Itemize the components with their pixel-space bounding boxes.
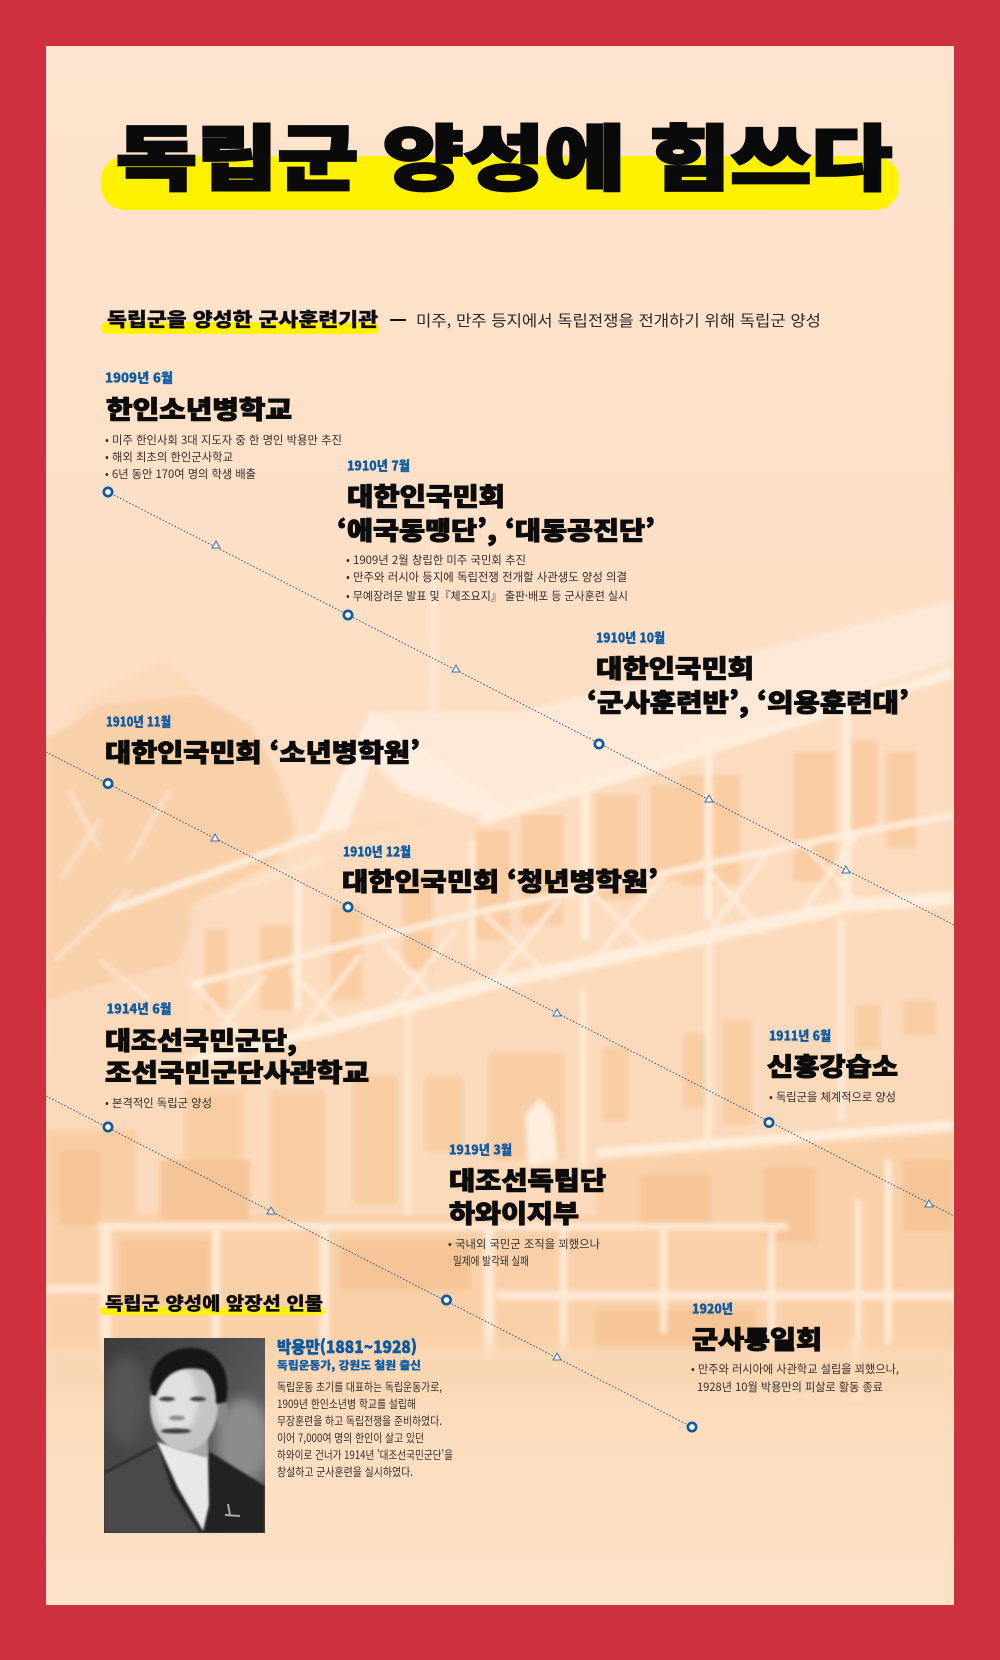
entry: 1911.6 신흥강습소 — [765, 1026, 898, 1127]
porch band — [596, 1125, 954, 1153]
tree — [46, 695, 295, 1020]
name: 대조선독립단 — [449, 1162, 606, 1198]
marker — [595, 740, 603, 748]
entry: 1920 군사통일회 — [688, 1298, 899, 1431]
name — [105, 1022, 369, 1090]
biography text: 무장훈련을 하고 독립전쟁을 준비하였다. — [277, 1413, 442, 1429]
marker — [344, 611, 352, 619]
line 3 — [46, 1096, 692, 1427]
bullets: 1928년 10월 박용만의 피살로 활동 종료 — [697, 1379, 883, 1395]
roof plane — [373, 600, 954, 812]
name — [587, 650, 909, 720]
eyes and moustache — [159, 1397, 206, 1434]
bullets: • 해외 최초의 한인군사학교 — [105, 449, 233, 465]
entry: 1910.7 대한인국민회 애국동맹단 대동공진단 — [337, 456, 655, 619]
date: 1909년 6월 — [105, 368, 173, 386]
bullets: • 국내외 국민군 조직을 꾀했으나 — [448, 1236, 600, 1252]
left lower roof — [110, 835, 318, 910]
date: 1911년 6월 — [769, 1026, 831, 1044]
lower storey — [192, 932, 773, 1070]
marker — [104, 1123, 112, 1131]
balcony railing — [190, 815, 954, 1065]
bullets: • 6년 동안 170여 명의 학생 배출 — [105, 466, 256, 482]
name — [337, 478, 655, 548]
gable — [322, 712, 509, 832]
title text: 독립군 양성에 힘쓰다 — [116, 103, 892, 205]
biography text — [277, 1379, 453, 1480]
bullets: • 만주와 러시아에 사관학교 설립을 꾀했으나, — [691, 1361, 899, 1377]
bullets: • 1909년 2월 창립한 미주 국민회 추진 — [346, 552, 526, 568]
name: 대한인국민회 ‘소년병학원’ — [105, 734, 420, 770]
heading highlight — [101, 322, 379, 334]
entry: 1919.3 대조선독립단 하와이지부 — [442, 1140, 606, 1304]
name: ‘군사훈련반’, ‘의용훈련대’ — [587, 684, 909, 720]
date: 1920년 — [692, 1298, 733, 1318]
marker — [688, 1423, 696, 1431]
section heading: training institutions — [101, 305, 821, 334]
entry: 1909 한인소년병학교 — [104, 368, 342, 496]
timeline connector lines — [46, 492, 954, 1427]
ear — [216, 1401, 228, 1424]
date: 1910년 12월 — [343, 842, 411, 860]
fence — [46, 1160, 954, 1400]
section heading: leading figure — [100, 1290, 325, 1316]
biography text: 하와이로 건너가 1914년 '대조선국민군단'을 — [277, 1447, 453, 1463]
name: 군사통일회 — [692, 1320, 822, 1356]
portrait photo of 박용만 — [103, 1338, 271, 1533]
line 2 — [46, 752, 954, 1216]
entry: 1910.10 대한인국민회 군사훈련반 의용훈련대 — [587, 628, 909, 748]
name: 조선국민군단사관학교 — [105, 1054, 369, 1090]
ground — [46, 1345, 954, 1395]
marker — [765, 1118, 773, 1127]
bullets — [691, 1361, 899, 1395]
upper verticals — [295, 700, 850, 1010]
bullets — [105, 432, 342, 482]
entry: 1910.12 청년병학원 — [342, 842, 658, 911]
neck shadow — [180, 1436, 210, 1458]
name: ‘애국동맹단’, ‘대동공진단’ — [337, 512, 655, 548]
name: 대조선국민군단, — [105, 1022, 297, 1058]
biography text: 독립운동 초기를 대표하는 독립운동가로, — [277, 1379, 442, 1395]
dash — [390, 319, 406, 321]
hair — [150, 1348, 227, 1404]
role: 독립운동가, 강원도 철원 출신 — [277, 1357, 421, 1373]
marker — [344, 903, 352, 911]
bullets: • 미주 한인사회 3대 지도자 중 한 명인 박용만 추진 — [105, 432, 342, 448]
marker — [104, 779, 112, 788]
bio of 박용만 — [277, 1334, 453, 1480]
name: 한인소년병학교 — [106, 390, 292, 426]
upper storey wall — [190, 868, 328, 938]
entry: 1910.11 소년병학원 — [104, 712, 420, 788]
bullets: • 만주와 러시아 등지에 독립전쟁 전개할 사관생도 양성 의결 — [346, 569, 627, 585]
shirt — [157, 1442, 209, 1531]
name: 하와이지부 — [449, 1194, 579, 1230]
heading highlight — [100, 1307, 325, 1315]
line 1 — [108, 492, 954, 925]
heading text: 독립군을 양성한 군사훈련기관 — [107, 305, 378, 332]
heading description: 미주, 만주 등지에서 독립전쟁을 전개하기 위해 독립군 양성 — [416, 309, 821, 331]
upper windows — [205, 740, 916, 1010]
biography text: 창설하고 군사훈련을 실시하였다. — [277, 1464, 413, 1480]
marker — [442, 1296, 451, 1304]
coat — [104, 1444, 265, 1533]
biography text: 이어 7,000여 명의 한인이 살고 있던 — [277, 1430, 424, 1446]
bullet: • 본격적인 독립군 양성 — [105, 1095, 212, 1111]
bullets: • 무예장려문 발표 및『체조요지』 출판·배포 등 군사훈련 실시 — [346, 588, 628, 604]
name: 신흥강습소 — [767, 1048, 898, 1084]
biography text: 1909년 한인소년병 학교를 설립해 — [277, 1396, 416, 1412]
bullets: 일제에 발각돼 실패 — [453, 1253, 529, 1269]
person on porch — [525, 1098, 558, 1165]
bullet: • 독립군을 체계적으로 양성 — [769, 1089, 896, 1105]
entry: 1914.6 대조선국민군단 — [104, 998, 369, 1131]
marker — [104, 488, 112, 496]
heading text: 독립군 양성에 앞장선 인물 — [105, 1290, 323, 1316]
name: 대한인국민회 — [596, 650, 754, 686]
flagpole — [431, 490, 437, 715]
title highlight bar — [101, 156, 899, 210]
arrows on the lines — [211, 541, 933, 1360]
date: 1910년 11월 — [106, 712, 171, 730]
name: 대한인국민회 ‘청년병학원’ — [342, 862, 658, 898]
date: 1910년 7월 — [347, 456, 410, 474]
name — [449, 1162, 606, 1230]
name: 대한인국민회 — [347, 478, 505, 514]
name: 박용만(1881~1928) — [277, 1334, 417, 1358]
date: 1914년 6월 — [106, 998, 172, 1018]
faint tree top — [82, 664, 192, 710]
face — [150, 1359, 218, 1451]
eave — [480, 672, 954, 820]
date: 1910년 10월 — [596, 628, 665, 646]
title — [101, 103, 899, 210]
bullets — [346, 552, 628, 604]
date: 1919년 3월 — [449, 1140, 512, 1158]
bullets — [448, 1236, 600, 1269]
